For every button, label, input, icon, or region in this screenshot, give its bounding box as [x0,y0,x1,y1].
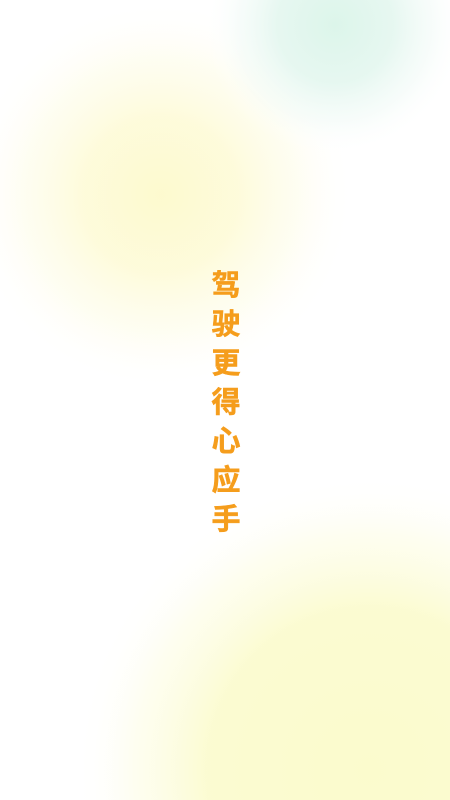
vertical title: 应 [211,465,240,497]
vertical title: 驾 [211,270,240,302]
vertical title: 更 [211,348,240,380]
yellow glow, bottom right [75,475,450,800]
vertical title: 心 [211,426,240,458]
yellow glow, upper left [0,0,355,390]
vertical title [211,270,240,536]
vertical title: 驶 [211,309,240,341]
vertical title: 手 [211,504,240,536]
vertical title: 得 [211,387,240,419]
mint glow, top right [205,0,450,155]
